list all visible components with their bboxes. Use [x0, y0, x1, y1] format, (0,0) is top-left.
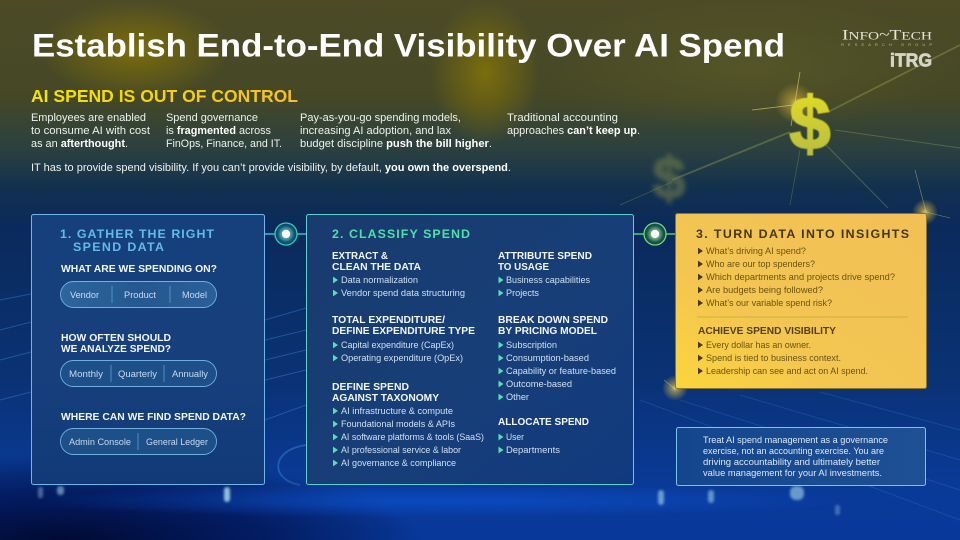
pill: vendor, product, model: Vendor	[70, 289, 99, 300]
icon: faint blurred dollar sign: $	[653, 146, 685, 211]
group: break down spend by pricing model: BREAK DOWN SPEND	[498, 315, 608, 326]
pill: admin console, general ledger: Admin Console	[69, 436, 131, 447]
group: allocate spend	[498, 417, 589, 455]
text block: fragmented governance: is fragmented across	[166, 125, 271, 137]
group: define spend against taxonomy: AI governance & compliance	[341, 457, 456, 468]
group: define spend against taxonomy: AGAINST TAXONOMY	[332, 393, 439, 404]
group: attribute spend to usage: Projects	[506, 287, 539, 298]
callout: treat AI spend as governance: exercise, not an accounting exercise. You are	[703, 445, 884, 456]
text block: push the bill higher: increasing AI adoption, and lax	[300, 125, 452, 137]
group: define spend against taxonomy: AI infrastructure & compute	[341, 405, 453, 416]
text block: afterthought: as an afterthought.	[31, 138, 128, 150]
pill: admin console, general ledger	[60, 428, 216, 454]
pill: monthly, quarterly, annually: Monthly	[69, 368, 103, 379]
list: achieve spend visibility: Leadership can see and act on AI spend.	[706, 365, 868, 376]
text block: accounting can't keep up: Traditional accounting	[507, 112, 618, 124]
connector: step 1 to step 2	[265, 223, 306, 245]
group: total expenditure type: Capital expenditure (CapEx)	[341, 339, 454, 350]
pill: monthly, quarterly, annually: Quarterly	[118, 368, 157, 379]
group: break down spend by pricing model: Outcome-based	[506, 378, 572, 389]
group: extract and clean the data: Vendor spend data structuring	[341, 287, 465, 298]
list: insight questions: What’s driving AI spend?	[706, 245, 806, 256]
group: extract and clean the data: CLEAN THE DATA	[332, 262, 422, 273]
list: insight questions: Who are our top spenders?	[706, 258, 815, 269]
group: break down spend by pricing model: Subscription	[506, 339, 557, 350]
callout: treat AI spend as governance: Treat AI spend management as a governance	[703, 434, 888, 445]
group: allocate spend: Departments	[506, 444, 560, 455]
title: Establish End-to-End Visibility Over AI Spend	[32, 28, 785, 64]
callout: treat AI spend as governance: value management for your AI investments.	[703, 467, 882, 478]
group: extract and clean the data: EXTRACT &	[332, 251, 389, 262]
text block: afterthought: to consume AI with cost	[31, 125, 150, 137]
pill: vendor, product, model: Product	[124, 289, 156, 300]
panel: 1 gather the right spend data	[32, 214, 264, 484]
group: total expenditure type: TOTAL EXPENDITURE/	[332, 315, 445, 326]
pill: vendor, product, model	[60, 282, 216, 308]
group: attribute spend to usage: TO USAGE	[498, 262, 549, 273]
group: total expenditure type: Operating expenditure (OpEx)	[341, 352, 463, 363]
text block: afterthought: Employees are enabled	[31, 112, 146, 124]
logo: Info-Tech Research Group and ITRG: iTRG	[890, 50, 932, 70]
panel heading: turn data into insights: 3. TURN DATA INTO INSIGHTS	[696, 227, 909, 241]
panel heading: gather the right spend data	[60, 227, 214, 254]
logo: Info-Tech Research Group and ITRG: INFO ~T ECH	[842, 28, 932, 44]
text block: afterthought	[31, 112, 150, 150]
list: achieve spend visibility	[698, 326, 868, 376]
logo: Info-Tech Research Group and ITRG	[841, 28, 932, 70]
callout: treat AI spend as governance: driving accountability and ultimately better	[703, 456, 880, 467]
group: break down spend by pricing model: BY PRICING MODEL	[498, 326, 597, 337]
pill: monthly, quarterly, annually	[60, 360, 216, 386]
group: break down spend by pricing model: Other	[506, 391, 529, 402]
text block: push the bill higher: budget discipline push the bill higher .	[300, 138, 492, 150]
text block: accounting can't keep up: approaches can’t keep up.	[507, 125, 640, 137]
group: allocate spend: User	[506, 431, 524, 442]
question: how often should we analyze spend: WE ANALYZE SPEND?	[61, 344, 171, 355]
list: insight questions: What’s our variable spend risk?	[706, 297, 832, 308]
group: define spend against taxonomy: AI software platforms & tools (SaaS)	[341, 431, 484, 442]
text block: push the bill higher: Pay-as-you-go spending models,	[300, 112, 461, 124]
group: allocate spend: ALLOCATE SPEND	[498, 417, 589, 428]
text block: fragmented governance: Spend governance	[166, 112, 258, 124]
panel: 3 turn data into insights	[662, 170, 950, 401]
group: extract and clean the data	[332, 251, 465, 298]
list: insight questions: Which departments and projects drive spend?	[706, 271, 895, 282]
panel heading: classify spend: 2. CLASSIFY SPEND	[332, 227, 470, 241]
list: insight questions: Are budgets being followed?	[706, 284, 823, 295]
group: attribute spend to usage	[498, 251, 592, 298]
group: break down spend by pricing model: Consumption-based	[506, 352, 589, 363]
pill: monthly, quarterly, annually: Annually	[172, 368, 208, 379]
callout: treat AI spend as governance	[676, 428, 926, 486]
text block: fragmented governance	[166, 112, 282, 150]
group: attribute spend to usage: Business capabilities	[506, 274, 590, 285]
pill: admin console, general ledger: General Ledger	[146, 436, 208, 447]
pill: vendor, product, model: Model	[182, 289, 207, 300]
question: how often should we analyze spend: HOW OFTEN SHOULD	[61, 333, 171, 344]
text block: accounting can't keep up	[507, 112, 640, 137]
connector: step 2 to step 3	[634, 223, 676, 245]
panel heading: gather the right spend data: 1. GATHER THE RIGHT	[60, 227, 214, 241]
icon: large glowing dollar sign: $	[789, 82, 831, 165]
group: extract and clean the data: Data normalization	[341, 274, 418, 285]
group: define spend against taxonomy: AI professional service & labor	[341, 444, 461, 455]
group: attribute spend to usage: ATTRIBUTE SPEND	[498, 251, 592, 262]
group: total expenditure type: DEFINE EXPENDITURE TYPE	[332, 326, 475, 337]
question: what are we spending on: WHAT ARE WE SPENDING ON?	[61, 264, 217, 275]
group: define spend against taxonomy: DEFINE SPEND	[332, 382, 409, 393]
group: break down spend by pricing model: Capability or feature-based	[506, 365, 616, 376]
icon: large glowing dollar sign	[752, 72, 831, 165]
group: break down spend by pricing model	[498, 315, 616, 402]
list: achieve spend visibility: Every dollar has an owner.	[706, 339, 811, 350]
list: insight questions	[698, 245, 895, 308]
text block: push the bill higher	[300, 112, 492, 150]
logo: Info-Tech Research Group and ITRG: RESEARCH GROUP	[841, 42, 932, 47]
panel heading: gather the right spend data: SPEND DATA	[73, 240, 164, 254]
text block: you own the overspend: IT has to provide spend visibility. If you can’t provide visibility, by default, you own the overspend .	[31, 162, 511, 174]
list: achieve spend visibility: Spend is tied to business context.	[706, 352, 841, 363]
group: define spend against taxonomy: Foundational models & APIs	[341, 418, 455, 429]
text block: fragmented governance: FinOps, Finance, and IT.	[166, 138, 282, 150]
group: total expenditure type	[332, 315, 475, 363]
question: how often should we analyze spend	[61, 333, 171, 355]
group: define spend against taxonomy	[332, 382, 484, 468]
section heading: AI spend is out of control: AI SPEND IS OUT OF CONTROL	[31, 86, 298, 106]
panel: 2 classify spend	[306, 214, 634, 484]
list: achieve spend visibility: ACHIEVE SPEND VISIBILITY	[698, 326, 836, 337]
question: where can we find spend data: WHERE CAN WE FIND SPEND DATA?	[61, 412, 246, 423]
